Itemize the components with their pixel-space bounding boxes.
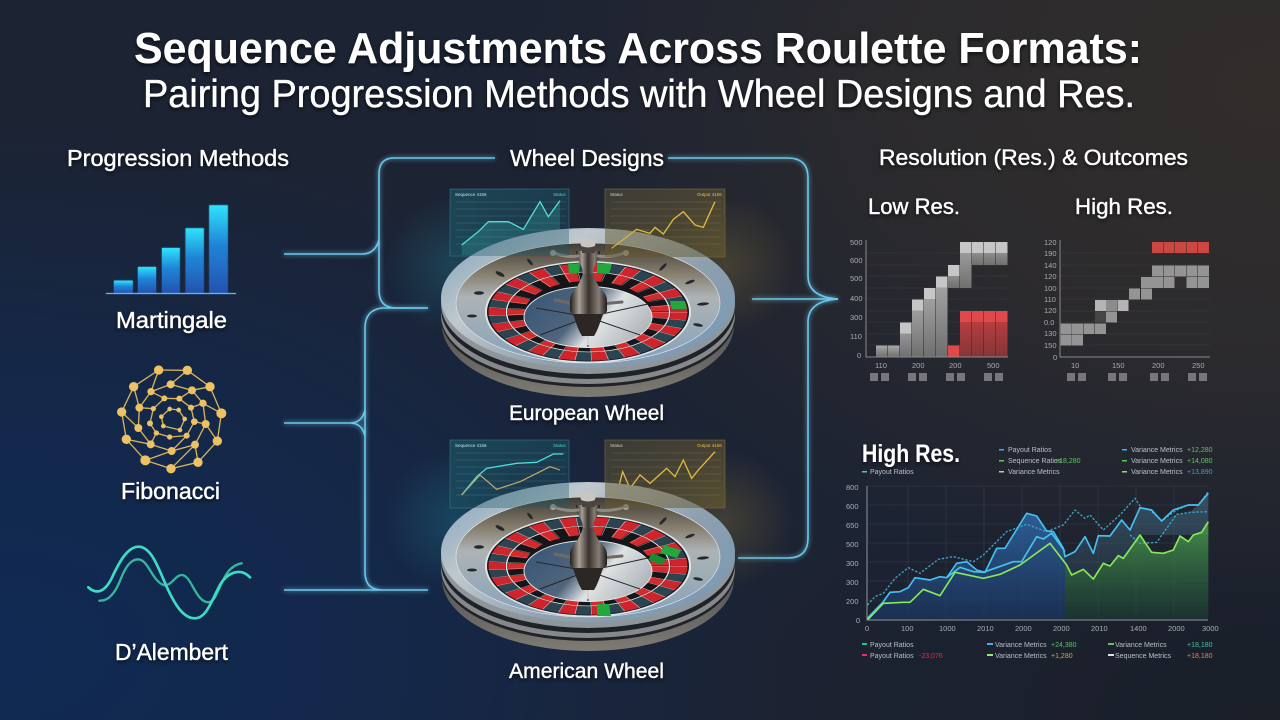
chart: low res pixel bars: 500 (987, 361, 1000, 370)
chart: high res line chart: 1400 (1130, 624, 1147, 633)
european wheel group (385, 189, 795, 397)
legend: top of large chart: Variance Metrics (1131, 447, 1183, 454)
legend: bottom of large chart: Variance Metrics (995, 653, 1047, 660)
chart: low res pixel bars: 110 (850, 332, 862, 341)
chart: high res pixel grid: 120 (1044, 272, 1057, 281)
chart: high res line chart: 600 (846, 502, 859, 511)
chart: high res pixel grid: 0.0 (1044, 318, 1054, 327)
chart: high res line chart: 2000 (1168, 624, 1185, 633)
chart: high res line chart: 650 (846, 521, 859, 530)
legend: top of large chart: +12,280 (1187, 447, 1213, 454)
chart: low res pixel bars: 400 (850, 294, 863, 303)
title: Pairing Progression Methods with Wheel Designs and Res. (143, 73, 1135, 116)
heading: progression methods: Progression Methods (67, 145, 289, 171)
legend: bottom of large chart (862, 642, 1213, 660)
label: low res: Low Res. (868, 194, 960, 219)
legend: top of large chart: Variance Metrics (1131, 458, 1183, 465)
red columns (960, 311, 1008, 357)
legend: top of large chart: Payout Ratios (1008, 447, 1052, 454)
label: american wheel: American Wheel (509, 660, 664, 683)
label: high res: High Res. (1075, 194, 1173, 219)
legend: bottom of large chart: +18,180 (1187, 653, 1213, 660)
legend: top of large chart: Sequence Ratios (1008, 458, 1062, 465)
legend: bottom of large chart: -23,076 (919, 653, 943, 660)
chart: high res pixel grid (1044, 238, 1210, 381)
legend: top of large chart: +14,080 (1187, 458, 1213, 465)
chart: high res line chart: 300 (846, 559, 859, 568)
mini chart: gold: Status (610, 443, 624, 448)
heading: wheel designs: Wheel Designs (510, 145, 664, 171)
legend: bottom of large chart: Variance Metrics (995, 642, 1047, 649)
mini chart: gold (605, 189, 725, 257)
mini chart: teal and tan (450, 440, 569, 508)
chart: high res line chart: 500 (846, 540, 859, 549)
chart: low res pixel bars: 0 (857, 351, 861, 360)
legend: top of large chart: +18,280 (1055, 458, 1081, 465)
title: Sequence Adjustments Across Roulette Formats: (134, 24, 1142, 73)
legend: bottom of large chart: Variance Metrics (1115, 642, 1167, 649)
chart: low res pixel bars: 300 (850, 313, 863, 322)
american wheel group (385, 440, 795, 651)
label: fibonacci: Fibonacci (121, 478, 220, 504)
legend: top of large chart: Variance Metrics (1008, 469, 1060, 476)
wheel: american (441, 482, 735, 651)
label: d'alembert: D’Alembert (115, 639, 229, 665)
chart: high res line chart: 200 (846, 597, 859, 606)
chart: high res line chart: 800 (846, 483, 859, 492)
chart: high res line chart: 2010 (1091, 624, 1108, 633)
icon: martingale bars (106, 205, 236, 294)
label: high res large: High Res. (862, 440, 960, 468)
icon: fibonacci spiral network (117, 365, 226, 473)
chart: high res pixel grid: 10 (1071, 361, 1079, 370)
legend: top of large chart (862, 447, 1213, 476)
chart: low res pixel bars: 200 (949, 361, 962, 370)
mini chart: teal: Status (553, 192, 567, 197)
mini chart: teal and tan: Status (553, 443, 567, 448)
chart: high res line chart: 100 (901, 624, 914, 633)
chart: high res pixel grid: 250 (1192, 361, 1205, 370)
mini chart: gold: Status (610, 192, 624, 197)
chart: high res pixel grid: 140 (1044, 261, 1057, 270)
chart: high res line chart: 2000 (1015, 624, 1032, 633)
chart: high res line chart: 2010 (977, 624, 994, 633)
legend: bottom of large chart: +18,180 (1187, 642, 1213, 649)
chart: low res pixel bars: 500 (850, 274, 863, 283)
mini chart: teal: Sequence 4156 (455, 192, 487, 197)
chart: high res pixel grid: 110 (1044, 295, 1056, 304)
connector lines (284, 158, 838, 590)
mini chart: teal and tan: Sequence 4156 (455, 443, 487, 448)
chart: low res pixel bars (850, 238, 1008, 381)
icon: d'alembert waves (88, 547, 250, 618)
chart: low res pixel bars: 600 (850, 256, 863, 265)
label: european wheel: European Wheel (509, 402, 664, 425)
mini chart: gold: Output 4156 (697, 192, 722, 197)
chart: high res pixel grid: 100 (1044, 284, 1057, 293)
label: martingale: Martingale (116, 307, 227, 333)
chart: low res pixel bars: 200 (912, 361, 925, 370)
chart: high res line chart: 0 (856, 616, 860, 625)
legend: bottom of large chart: Sequence Metrics (1115, 653, 1172, 660)
legend: bottom of large chart: Payout Ratios (870, 642, 914, 649)
chart: high res pixel grid: 150 (1044, 341, 1057, 350)
legend: top of large chart: Payout Ratios (870, 469, 914, 476)
chart: high res line chart: 300 (846, 578, 859, 587)
mini chart: teal (450, 189, 569, 256)
legend: bottom of large chart: Payout Ratios (870, 653, 914, 660)
chart: high res line chart (846, 483, 1219, 633)
legend: bottom of large chart: +24,380 (1051, 642, 1077, 649)
chart: high res line chart: 2000 (1053, 624, 1070, 633)
chart: high res line chart: 3000 (1202, 624, 1219, 633)
mini chart: gold (605, 440, 725, 508)
mini chart: gold: Output 4156 (697, 443, 722, 448)
chart: high res line chart: 1000 (939, 624, 956, 633)
chart: high res pixel grid: 190 (1044, 249, 1057, 258)
area fills (867, 495, 1208, 620)
legend: bottom of large chart: +1,280 (1051, 653, 1073, 660)
chart: high res pixel grid: 120 (1044, 238, 1057, 247)
chart: high res pixel grid: 120 (1044, 306, 1057, 315)
light top cells (900, 242, 1008, 334)
chart: high res pixel grid: 0 (1053, 353, 1057, 362)
chart: high res line chart: 0 (865, 624, 869, 633)
title (134, 24, 1142, 116)
heading: resolution and outcomes: Resolution (Res.) & Outcomes (879, 145, 1188, 170)
chart: high res pixel grid: 130 (1044, 329, 1057, 338)
chart: low res pixel bars: 110 (875, 361, 887, 370)
chart: low res pixel bars: 500 (850, 238, 863, 247)
legend: top of large chart: Variance Metrics (1131, 469, 1183, 476)
chart: high res pixel grid: 150 (1112, 361, 1125, 370)
legend: top of large chart: +13,890 (1187, 469, 1213, 476)
wheel: european (441, 227, 735, 397)
gray columns (876, 242, 1008, 357)
chart: high res pixel grid: 200 (1152, 361, 1165, 370)
